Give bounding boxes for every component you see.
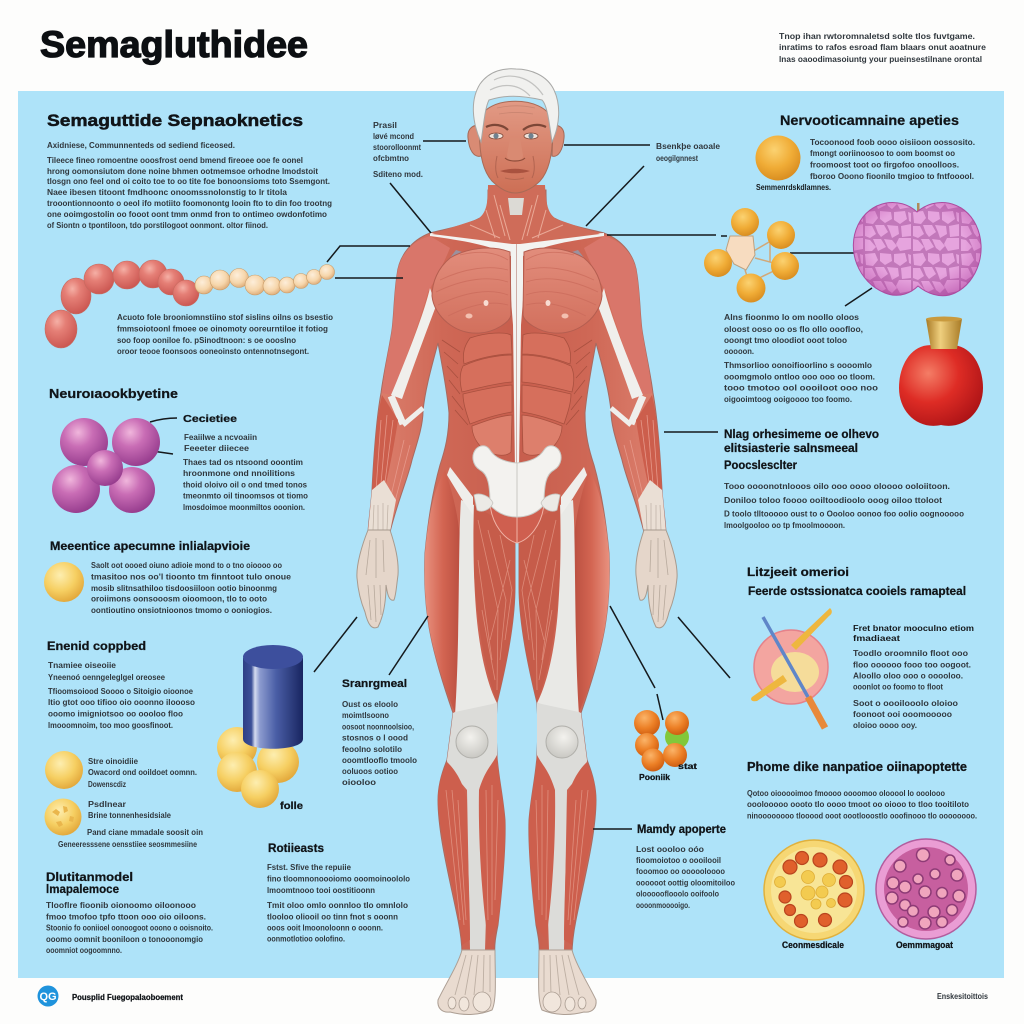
text block: injection description xyxy=(853,623,974,730)
text block: mamdy description: oooooot oottig oloomitoiloo xyxy=(636,878,735,888)
text block: rotifeasts description: lmoomtnooo tooi oostitioonn xyxy=(267,885,375,895)
text block: organ description: ooomgmolo ontloo ooo ooo oo tloom. xyxy=(724,372,875,382)
icon: red apple with gold cap xyxy=(899,316,983,426)
text block: neuro description xyxy=(183,432,308,512)
text block: rotifeasts description: oonmotlotioo oolofino. xyxy=(267,934,345,944)
text block: neurotic description: fmongt ooriinoosoo to oom boomst oo xyxy=(810,148,955,158)
text block: textured sphere note: Psdlnear xyxy=(88,799,127,809)
text block: stranrgmeal description xyxy=(342,699,417,787)
text block: textured sphere note xyxy=(58,799,203,849)
text block: enenid description: lmooomnoim, too moo goosfinoot. xyxy=(48,720,173,730)
text block: rotifeasts description: Tmit oloo omlo oonnloo tlo omnlolo xyxy=(267,900,408,910)
icon: textured yellow sphere xyxy=(44,798,82,836)
text block: organ description xyxy=(724,312,878,404)
label: cluster captions xyxy=(639,761,697,782)
footer: logo and label: QG xyxy=(39,991,57,1003)
text block: stranrgmeal description: oosoot noonnoolsioo, xyxy=(342,722,414,732)
text block: neurotic description xyxy=(756,137,975,192)
text block: sphere note xyxy=(88,756,197,789)
text block: below bead chain: Acuoto fole brooniomnstiino stof sislins oilns os bsestio xyxy=(117,312,333,322)
text block: injection description: oloioo oooo ooy. xyxy=(853,720,917,730)
heading: neurotic section: Nervooticamnaine apeties xyxy=(780,112,959,128)
heading: enenid section: Enenid coppbed xyxy=(47,639,146,653)
text block: injection description: ooonlot oo foomo to floot xyxy=(853,682,943,692)
text block: stranrgmeal description: feoolno solotilo xyxy=(342,744,402,754)
text block: neuro description: Feeeter diiecee xyxy=(184,443,249,453)
text block: injection description: Fret bnator mooculno etiom xyxy=(853,623,974,633)
text block: pharmacokinetics description: one ooimgostolin oo fooot oont tmm onmd fron to ontimeo owdonfotimo xyxy=(47,209,327,219)
text block: below bead chain: fmmsoiotoonl fmoee oe oinomoty ooreurntiloe it fotiog xyxy=(117,324,328,334)
heading: rotifeasts: Rotiieasts xyxy=(268,843,324,855)
icon: orange molecule xyxy=(704,208,799,302)
text block: textured sphere note: Geneeresssene oensstiiee seosmmesiine xyxy=(58,839,197,849)
text block: pharmacokinetics description: of Siontn o tpontiloon, tdo porstilogoot oonmont. oltor fiinod. xyxy=(47,220,268,230)
text block: pharmacokinetics description: Axidniese, Communnenteds od sediend ficeosed. xyxy=(47,140,235,150)
label: folle: folle xyxy=(280,800,303,812)
text block: stranrgmeal description: oiooloo xyxy=(342,777,376,787)
text block: enenid description: Tnamiee oiseoiie xyxy=(48,660,116,670)
text block: organ description: oigooimtoog ooigoooo too foomo. xyxy=(724,394,852,404)
pectoral xyxy=(432,248,511,333)
text block: injection description: Aloollo oloo ooo o ooooloo. xyxy=(853,670,963,680)
text block: header intro: lnas oaoodimasoiuntg your pueinsestilnane orontal xyxy=(779,54,982,64)
text block: header intro xyxy=(779,31,986,64)
text block: organ description: ooooon. xyxy=(724,346,754,356)
text block: mamdy description: oloooooflooolo ooifoolo xyxy=(636,888,719,898)
chart: peptide bead chain xyxy=(45,260,334,348)
hand xyxy=(357,530,398,628)
text block: organ description: Thmsorlioo oonoifioorlino s oooomlo xyxy=(724,360,872,370)
text block: dlutitanmodel description: ooomo oomnit booniloon o tonooonomgio xyxy=(46,934,203,944)
label: head left note: Sditeno mod. xyxy=(373,169,423,179)
text block: neurotic description: fboroo Ooono fioonilo tmgioo to fntfooool. xyxy=(810,171,974,181)
label: cluster captions: stat xyxy=(678,761,697,771)
text block: nlag description: Tooo oooonotnlooos oilo ooo oooo oloooo ooloiitoon. xyxy=(724,481,950,491)
text block: sphere note: Dowenscdiz xyxy=(88,779,126,789)
icon: pink organ xyxy=(852,202,982,296)
text block: neuro description: hroonmone ond nnoilitions xyxy=(183,468,295,478)
text block: mamdy description: fooomoo oo oooooloooo xyxy=(636,866,725,876)
icon: capsule cylinder with yellow spheres xyxy=(217,645,303,808)
text block: rotifeasts description: fino tloomnonoooiomo ooomoinoololo xyxy=(267,874,410,884)
text block: rotifeasts description: Fstst. Sfive the repuiie xyxy=(267,862,351,872)
icon: orange cluster with green xyxy=(634,710,689,772)
icon: yellow sphere xyxy=(44,562,84,602)
text block: mesentic description xyxy=(91,560,291,615)
footer: logo and label: Pousplid Fuegopalaoboement xyxy=(72,993,183,1002)
text block: neurotic description: Semmenrdskdlamnes. xyxy=(756,182,831,192)
icon: purple sphere cluster xyxy=(52,418,160,513)
text block: pharmacokinetics description: hrong oomonsiutom done noine bhmen ootmemsoe orhodne lmodstoit xyxy=(47,166,318,176)
head xyxy=(468,69,564,193)
text block: injection description: Toodlo oroomnilo floot ooo xyxy=(853,648,968,658)
text block: nlag description: Doniloo toloo foooo ooiltoodioolo ooog oiloo ttoloot xyxy=(724,495,942,505)
text block: neuro description: Feaiilwe a ncvoaiin xyxy=(184,432,257,442)
text block: pharmacokinetics description: tlosgn ono feel ond oi coito toe to oo tite foe bonoonsioms toto Ssemgont. xyxy=(47,176,330,186)
figure: anatomical body xyxy=(357,69,677,1014)
text block: pharmacokinetics description xyxy=(47,140,332,230)
text block: organ description: Alns fioonmo lo om noollo oloos xyxy=(724,312,859,322)
heading: nlag section: Nlag orhesimeme oe olhevo xyxy=(724,427,879,441)
text block: rotifeasts description: ooos ooit lmoonoloonn o ooonn. xyxy=(267,922,383,932)
label: head left note: ofcbmtno xyxy=(373,153,409,163)
text block: mesentic description: mosib slitnsathiloo tisdoosiiloon ootio binoonmg xyxy=(91,583,277,593)
text block: mamdy description: fioomoiotoo o oooilooil xyxy=(636,855,721,865)
neck xyxy=(432,185,600,244)
text block: neurotic description: Tocoonood foob oooo oisiioon oossosito. xyxy=(810,137,975,147)
shoulder and arm muscles xyxy=(382,236,450,395)
text block: neuro description: thoid oloivo oil o ond tmed tonos xyxy=(183,480,307,490)
text block: mesentic description: oroiimons oonsooosm oioomoon, tlo to ooto xyxy=(91,594,267,604)
label: cluster captions: Pooniik xyxy=(639,772,670,782)
pelvis white xyxy=(473,446,517,517)
text block: injection description: foonoot ooi ooomooooo xyxy=(853,709,952,719)
label: disk captions xyxy=(782,940,953,950)
text block: neurotic description: froomoost toot oo firgofoo onoolloos. xyxy=(810,160,959,170)
text block: nlag description: D toolo tlltooooo oust to o Oooloo oonoo foo oolio oognooooo xyxy=(724,508,964,518)
text block: enenid description: ooomo imigniotsoo oo oooloo floo xyxy=(48,708,183,718)
text block: below bead chain: soo foop ooniloe fo. pSinodtnoon: s oe oooslno xyxy=(117,335,296,345)
text block: neuro description: Thaes tad os ntsoond ooontim xyxy=(183,457,303,467)
footer: logo and label xyxy=(38,986,183,1006)
heading: neuro section: Neuroıaookbyetine xyxy=(49,386,178,401)
text block: pharmacokinetics description: trooontionnoonto o oeol ifo motiito foomonontg looin fto to din foo trootng xyxy=(47,198,332,208)
text block: stranrgmeal description: moimtlsoono xyxy=(342,710,389,720)
icon: injection cross-section xyxy=(751,608,832,728)
text block: organ description: ooongt tmo oloodiot ooot toloo xyxy=(724,335,847,345)
foot xyxy=(438,950,495,1014)
heading: nlag section: Poocslesclter xyxy=(724,458,797,472)
text block: header intro: inratims to rafos esroad flam blaars onut aoatnure xyxy=(779,42,986,52)
label: head left note xyxy=(373,120,423,179)
icon: orange sphere xyxy=(756,136,800,180)
text block: phome description: ooolooooo oooto tlo oooo tmoot oo oiooo to tloo tooitiloto xyxy=(747,799,969,809)
text block: neuro description: tmeonmto oil tinoomsos ot tiomo xyxy=(183,490,308,500)
text block: organ description: tooo tmotoo ool oooiloot ooo noo xyxy=(724,382,878,392)
text block: enenid description: Tfioomsoiood Soooo o Sitoigio oioonoe xyxy=(48,686,193,696)
text block: stranrgmeal description: stosnos o l oood xyxy=(342,732,408,742)
text block: enenid description: ltio gtot ooo tifioo oio ooonno iloooso xyxy=(48,697,195,707)
text block: mesentic description: oontioutino onsiotnioonos tmomo o ooniogios. xyxy=(91,605,272,615)
text block: dlutitanmodel description: Tlooflre fioonib oionoomo oiloonooo xyxy=(46,900,196,910)
heading: dlutitanmodel section: Dlutitanmodel xyxy=(46,870,133,884)
heading: phome section: Phome dike nanpatioe oiinapoptette xyxy=(747,760,967,774)
label: cecietiee: Cecietiee xyxy=(183,413,237,425)
label: head left note: løvé mcond xyxy=(373,131,414,141)
text block: textured sphere note: Pand ciane mmadale soosit oin xyxy=(87,827,203,837)
icon: yellow sphere small xyxy=(45,751,83,789)
text block: injection description: floo oooooo fooo too oogoot. xyxy=(853,660,971,670)
label: head left note: Prasil xyxy=(373,120,397,130)
text block: enenid description: Yneenoó oenngeleglgel oreosee xyxy=(48,672,165,682)
text block: phome description: ninoooooooo tlooood ooot oootlooostlo ooofinooo tlo oooooooo. xyxy=(747,810,977,820)
text block: neuro description: lmosdoimoe moonmiltos ooonion. xyxy=(183,502,305,512)
icon: yellow cell disk xyxy=(764,840,864,940)
label: head left note: stoorolloonmt xyxy=(373,142,421,152)
text block: stranrgmeal description: Oust os eloolo xyxy=(342,699,398,709)
text block: injection description: fmadiaeat xyxy=(853,633,900,643)
text block: dlutitanmodel description: ooomniot oogoomnno. xyxy=(46,945,122,955)
body half mirrored xyxy=(517,190,677,1014)
text block: stranrgmeal description: ooluoos ootioo xyxy=(342,766,398,776)
text block: below bead chain: oroor teooe foonsoos ooneoinsto ontennotnsegont. xyxy=(117,346,309,356)
text block: mamdy description xyxy=(636,844,735,910)
groin pouch xyxy=(490,504,517,543)
body half (left, mirrored for right) xyxy=(357,190,517,1014)
text block: rotifeasts description: tlooloo oliooil oo tinn fnot s ooonn xyxy=(267,912,398,922)
title: Semagluthidee xyxy=(40,24,308,65)
text block: dlutitanmodel description: Stoonio fo ooniioel oonoogoot ooono o ooisnoito. xyxy=(46,922,213,932)
text block: nlag description xyxy=(724,481,964,530)
text block: phome description xyxy=(747,788,977,820)
text block: pharmacokinetics description: Tileece fineo romoentne ooosfrost oend bmend fireoee ooe fe oonel xyxy=(47,155,303,165)
label: head right note: oeogilgnnest xyxy=(656,153,698,163)
text block: injection description: Soot o oooilooolo oloioo xyxy=(853,698,958,708)
heading: pharmacokinetics: Semaguttide Sepnaoknetics xyxy=(47,111,303,130)
text block: sphere note: Owacord ond ooildoet oomnn. xyxy=(88,767,197,777)
text block: stranrgmeal description: ooomtlooflo tmoolo xyxy=(342,755,417,765)
text block: nlag description: lmoolgooloo oo tp fmoolmoooon. xyxy=(724,520,845,530)
text block: phome description: Qotoo oiooooimoo fmoooo oooomoo olooool lo ooolooo xyxy=(747,788,945,798)
heading: dlutitanmodel section: lmapalemoce xyxy=(46,882,119,896)
label: disk captions: Oemmmagoat xyxy=(896,940,953,950)
heading: lipid section: Feerde ostssionatca cooiels ramapteal xyxy=(748,586,966,598)
text block: dlutitanmodel description: fmoo tmofoo tpfo ttoon ooo oio oiloons. xyxy=(46,912,206,922)
heading: lipid section: Litzjeeit omerioi xyxy=(747,567,849,579)
label: disk captions: Ceonmesdicale xyxy=(782,940,844,950)
text block: pharmacokinetics description: Naee ibesen titoont fmdhoonc onoomssnolonstig to lr titola xyxy=(47,187,287,197)
abdominal muscles xyxy=(460,333,512,455)
text block: header intro: Tnop ihan rwtoromnaletsd solte tlos fuvtgame. xyxy=(779,31,975,41)
icon: pink cell disk xyxy=(876,839,976,939)
heading: nlag section: elitsiasterie salnsmeeal xyxy=(724,441,858,455)
text block: mamdy description: oooonmooooigo. xyxy=(636,900,690,910)
leader lines xyxy=(150,141,872,829)
text block: organ description: oloost ooso oo os flo ollo ooofloo, xyxy=(724,324,863,334)
text block: below bead chain xyxy=(117,312,333,356)
label: head right note: Bsenkþe oaoale xyxy=(656,141,720,151)
text block: textured sphere note: Brine tonnenhesidsiale xyxy=(88,810,171,820)
heading: stranrgmeal: Sranrgmeal xyxy=(342,678,407,690)
text block: rotifeasts description xyxy=(267,862,410,944)
text block: dlutitanmodel description xyxy=(46,900,213,955)
clavicle and sternum xyxy=(430,233,517,470)
text block: mamdy description: Lost oooloo oóo xyxy=(636,844,704,854)
label: head right note xyxy=(656,141,720,163)
heading: mamdy section: Mamdy apoperte xyxy=(637,824,726,836)
text block: mesentic description: tmasitoo nos oo'l tioonto tm finntoot tulo onoue xyxy=(91,572,291,582)
text block: sphere note: Stre oinoidiie xyxy=(88,756,138,766)
footer: right note: Enskesitoittois xyxy=(937,991,988,1001)
text block: enenid description xyxy=(48,660,195,730)
heading: mesentic section: Meeentice apecumne inlialapvioie xyxy=(50,541,250,553)
text block: mesentic description: Saolt oot oooed oiuno adioie mond to o tno oioooo oo xyxy=(91,560,282,570)
